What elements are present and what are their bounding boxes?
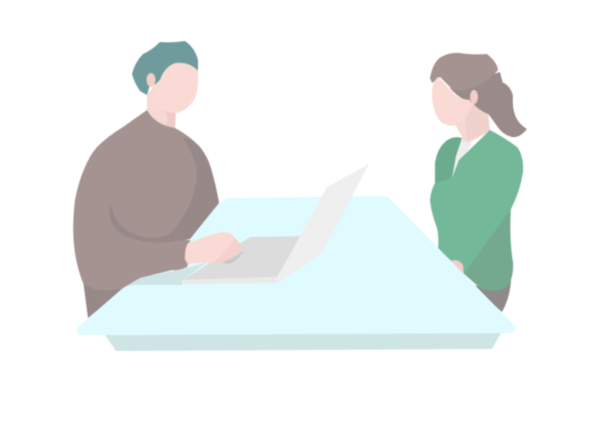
woman: legs [470, 280, 511, 312]
man figure [73, 41, 219, 290]
man: neck [147, 83, 176, 129]
man: ear [146, 73, 156, 87]
man: neck shadow [164, 109, 176, 129]
hand shadow [222, 250, 244, 264]
woman: neck shade [465, 105, 490, 141]
man: back and arm shadow [110, 138, 219, 243]
woman: face [432, 77, 470, 126]
laptop: front edge [182, 277, 279, 284]
man: face [152, 63, 198, 113]
laptop: keyboard base [183, 236, 301, 280]
hand shade [213, 238, 243, 263]
man: hand [185, 232, 244, 264]
woman: neck [455, 98, 490, 146]
hand shape [185, 232, 243, 264]
man: hair [132, 41, 198, 95]
woman: ear [470, 90, 478, 104]
woman: cardigan shade [462, 205, 513, 291]
woman: cardigan left side [435, 137, 462, 184]
man: legs [83, 280, 128, 318]
table [77, 196, 516, 351]
laptop [182, 164, 369, 284]
woman: hand [450, 260, 464, 274]
woman: ponytail [487, 80, 527, 137]
laptop: screen [277, 164, 369, 283]
woman figure [430, 53, 527, 312]
table: front edge [105, 333, 501, 351]
woman: shirt [452, 140, 472, 178]
man: torso [73, 110, 219, 290]
table: top [77, 196, 516, 335]
table: laptop shadow [125, 262, 207, 287]
woman: hair dark [450, 72, 503, 114]
woman: cardigan [430, 130, 523, 272]
woman: hair [430, 53, 498, 91]
